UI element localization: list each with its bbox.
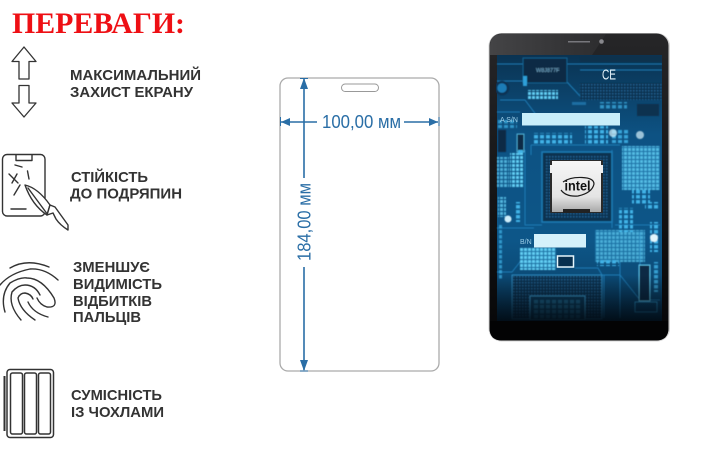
chip bbox=[550, 160, 603, 213]
lower socket bbox=[512, 275, 602, 319]
components row 1 bbox=[527, 90, 558, 100]
speaker bbox=[568, 41, 590, 42]
benefit: maximum protection bbox=[12, 47, 201, 117]
benefit: reduces fingerprints bbox=[0, 259, 162, 326]
screen bbox=[496, 55, 662, 321]
benefit: reduces fingerprints: ВИДИМІСТЬ bbox=[73, 276, 162, 293]
right lower IC bbox=[639, 265, 650, 301]
text: scratch resistance: СТІЙКІСТЬ bbox=[71, 168, 148, 186]
components row 2 bbox=[534, 133, 572, 144]
icon: up and down arrows bbox=[12, 47, 36, 117]
tablet bbox=[488, 33, 670, 342]
icon: screen with knife bbox=[2, 154, 68, 230]
circuit board: W8J877F bbox=[536, 68, 560, 74]
left components bbox=[497, 157, 509, 187]
top IC bbox=[523, 58, 567, 83]
white box bbox=[558, 256, 574, 267]
width dimension bbox=[280, 112, 439, 132]
right components bbox=[622, 146, 660, 190]
benefit: reduces fingerprints: ПАЛЬЦІВ bbox=[73, 309, 141, 326]
glass outline bbox=[280, 78, 439, 371]
camera bbox=[599, 39, 604, 44]
text: reduces fingerprints: ЗМЕНШУЄ bbox=[73, 259, 150, 276]
lower left components bbox=[520, 248, 556, 270]
circuit board bbox=[496, 56, 662, 320]
bottom fade bbox=[497, 275, 662, 321]
benefit: scratch resistance: ДО ПОДРЯПИН bbox=[70, 186, 182, 202]
text: maximum protection: МАКСИМАЛЬНИЙ bbox=[70, 66, 201, 84]
benefit: case compatibility bbox=[4, 370, 164, 438]
round capacitor bbox=[496, 82, 508, 94]
height dimension bbox=[294, 78, 314, 371]
label strips bbox=[522, 113, 620, 126]
intel logo: intel bbox=[564, 178, 590, 194]
CE mark: CE bbox=[602, 66, 616, 84]
diagram: screen protector dimensions bbox=[280, 78, 439, 371]
benefit: case compatibility: ІЗ ЧОХЛАМИ bbox=[71, 404, 164, 421]
chip socket bbox=[542, 152, 612, 222]
title: ПЕРЕВАГИ: bbox=[12, 7, 185, 40]
top connector bbox=[580, 83, 662, 100]
benefit: maximum protection: ЗАХИСТ ЕКРАНУ bbox=[70, 84, 194, 101]
benefit: scratch resistance bbox=[2, 154, 182, 230]
traces bbox=[497, 64, 662, 318]
benefit: reduces fingerprints: ВІДБИТКІВ bbox=[73, 293, 152, 310]
height dimension: 184,00 мм bbox=[294, 183, 314, 261]
icon: fingerprint bbox=[0, 263, 58, 320]
tablet body bbox=[488, 33, 670, 342]
speaker slot bbox=[342, 84, 378, 92]
text: case compatibility: СУМІСНІСТЬ bbox=[71, 387, 162, 404]
width dimension: 100,00 мм bbox=[322, 112, 401, 132]
screen: B/N bbox=[520, 239, 532, 246]
right grid block bbox=[595, 230, 645, 262]
icon: phone case bbox=[4, 370, 54, 438]
S/N prefix: A S/N bbox=[500, 117, 518, 124]
